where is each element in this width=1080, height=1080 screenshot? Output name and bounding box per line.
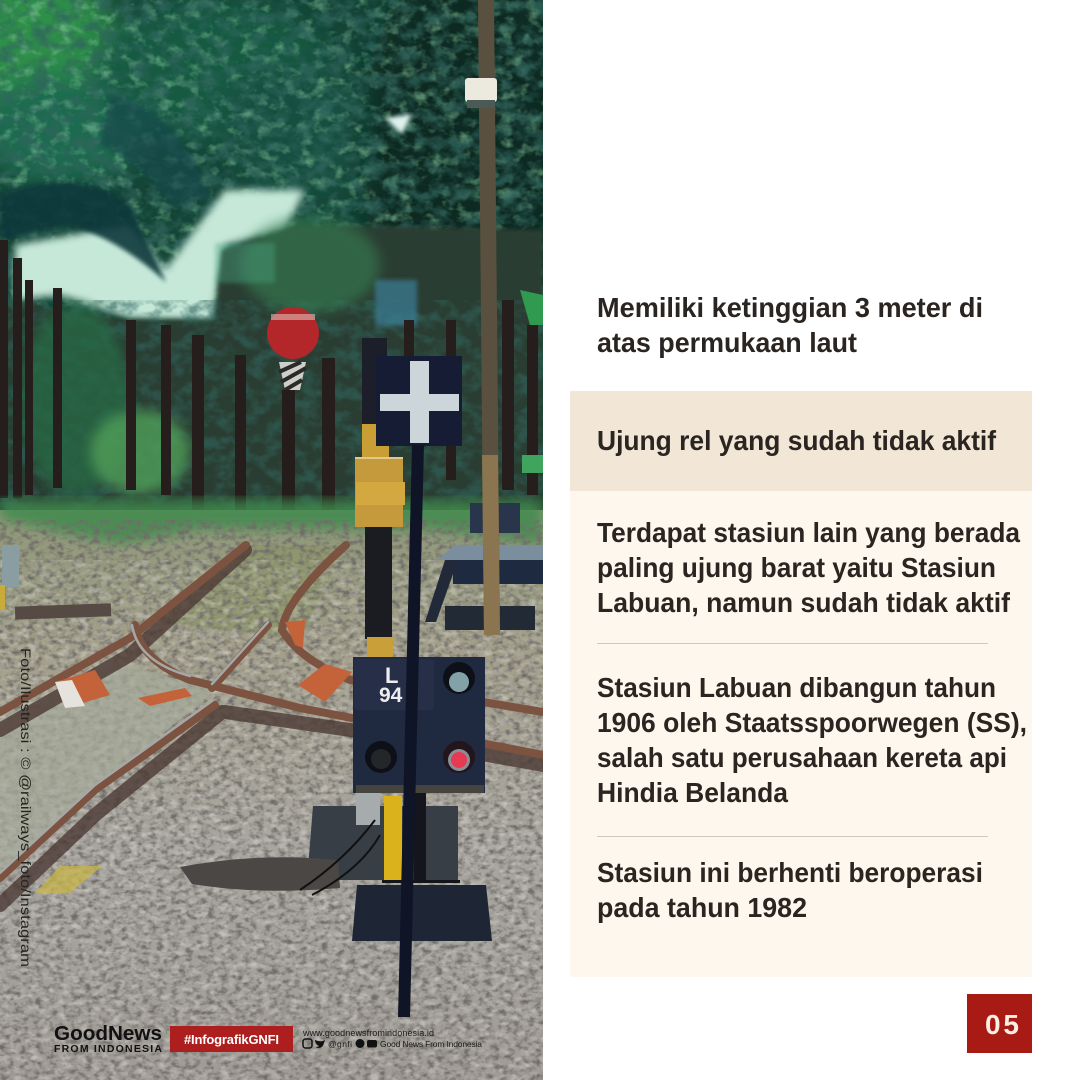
- panel: heading band: [570, 391, 1032, 491]
- orange rail chairs: [55, 620, 352, 708]
- website and social handles: Good News From Indonesia: [380, 1039, 482, 1049]
- photo: railway signal at end of track: [0, 0, 580, 1080]
- website and social handles: www.goodnewsfromindonesia.id: [302, 1028, 434, 1038]
- fact: built in 1906: Stasiun Labuan dibangun tahun: [597, 672, 996, 703]
- signal head with lamps: [353, 657, 485, 793]
- signal head with lamps: 94: [379, 684, 403, 707]
- signal head base and yellow strip: [352, 790, 492, 941]
- tree canopy background: [0, 0, 580, 520]
- photo credit: Foto/Ilustrasi : © @railways_foto/Instagram: [18, 648, 34, 967]
- panel: details: [570, 491, 1032, 977]
- fact: built in 1906: salah satu perusahaan kereta api: [597, 742, 1007, 773]
- website and social handles: @gnfi: [328, 1039, 352, 1049]
- fact: built in 1906: Hindia Belanda: [597, 777, 789, 808]
- website and social handles: [302, 1028, 482, 1049]
- GoodNews from Indonesia logo: GoodNews: [54, 1022, 162, 1045]
- fact: other station: [597, 517, 1021, 618]
- cross signal board: [376, 356, 462, 446]
- intro text: Memiliki ketinggian 3 meter di: [597, 292, 983, 323]
- signal head with lamps: L: [385, 663, 398, 688]
- GoodNews from Indonesia logo: FROM INDONESIA: [54, 1043, 162, 1055]
- fact: other station: Terdapat stasiun lain yang berada: [597, 517, 1021, 548]
- fact: built in 1906: [597, 672, 1027, 808]
- left trackside box: [0, 545, 111, 620]
- red round sign: [267, 307, 319, 525]
- fact: other station: paling ujung barat yaitu Stasiun: [597, 552, 996, 583]
- fact: closed in 1982: [597, 857, 983, 923]
- hashtag tag: #InfografikGNFI: [184, 1032, 279, 1047]
- fence and mid-ground vegetation: [0, 217, 543, 525]
- tall lamp post: [465, 0, 500, 635]
- fact: closed in 1982: pada tahun 1982: [597, 892, 807, 923]
- fact: built in 1906: 1906 oleh Staatsspoorwegen (SS),: [597, 707, 1027, 738]
- sky opening: [0, 95, 412, 320]
- GoodNews from Indonesia logo: [54, 1025, 162, 1052]
- rails: [0, 545, 543, 905]
- rear signal post: [362, 338, 393, 657]
- fact: other station: Labuan, namun sudah tidak aktif: [597, 587, 1011, 618]
- fact: closed in 1982: Stasiun ini berhenti beroperasi: [597, 857, 983, 888]
- grey equipment housing: [180, 793, 458, 895]
- intro text: [597, 292, 983, 358]
- ground and ballast: [0, 500, 543, 1080]
- bench behind signal: [425, 503, 543, 630]
- intro text: atas permukaan laut: [597, 327, 857, 358]
- hashtag tag: [170, 1026, 293, 1052]
- front signal pole: [398, 445, 424, 1017]
- heading: Ujung rel: Ujung rel yang sudah tidak aktif: [597, 425, 997, 456]
- page number badge: [967, 994, 1032, 1053]
- page number badge: 05: [985, 1009, 1019, 1040]
- yellow junction box: [355, 457, 405, 527]
